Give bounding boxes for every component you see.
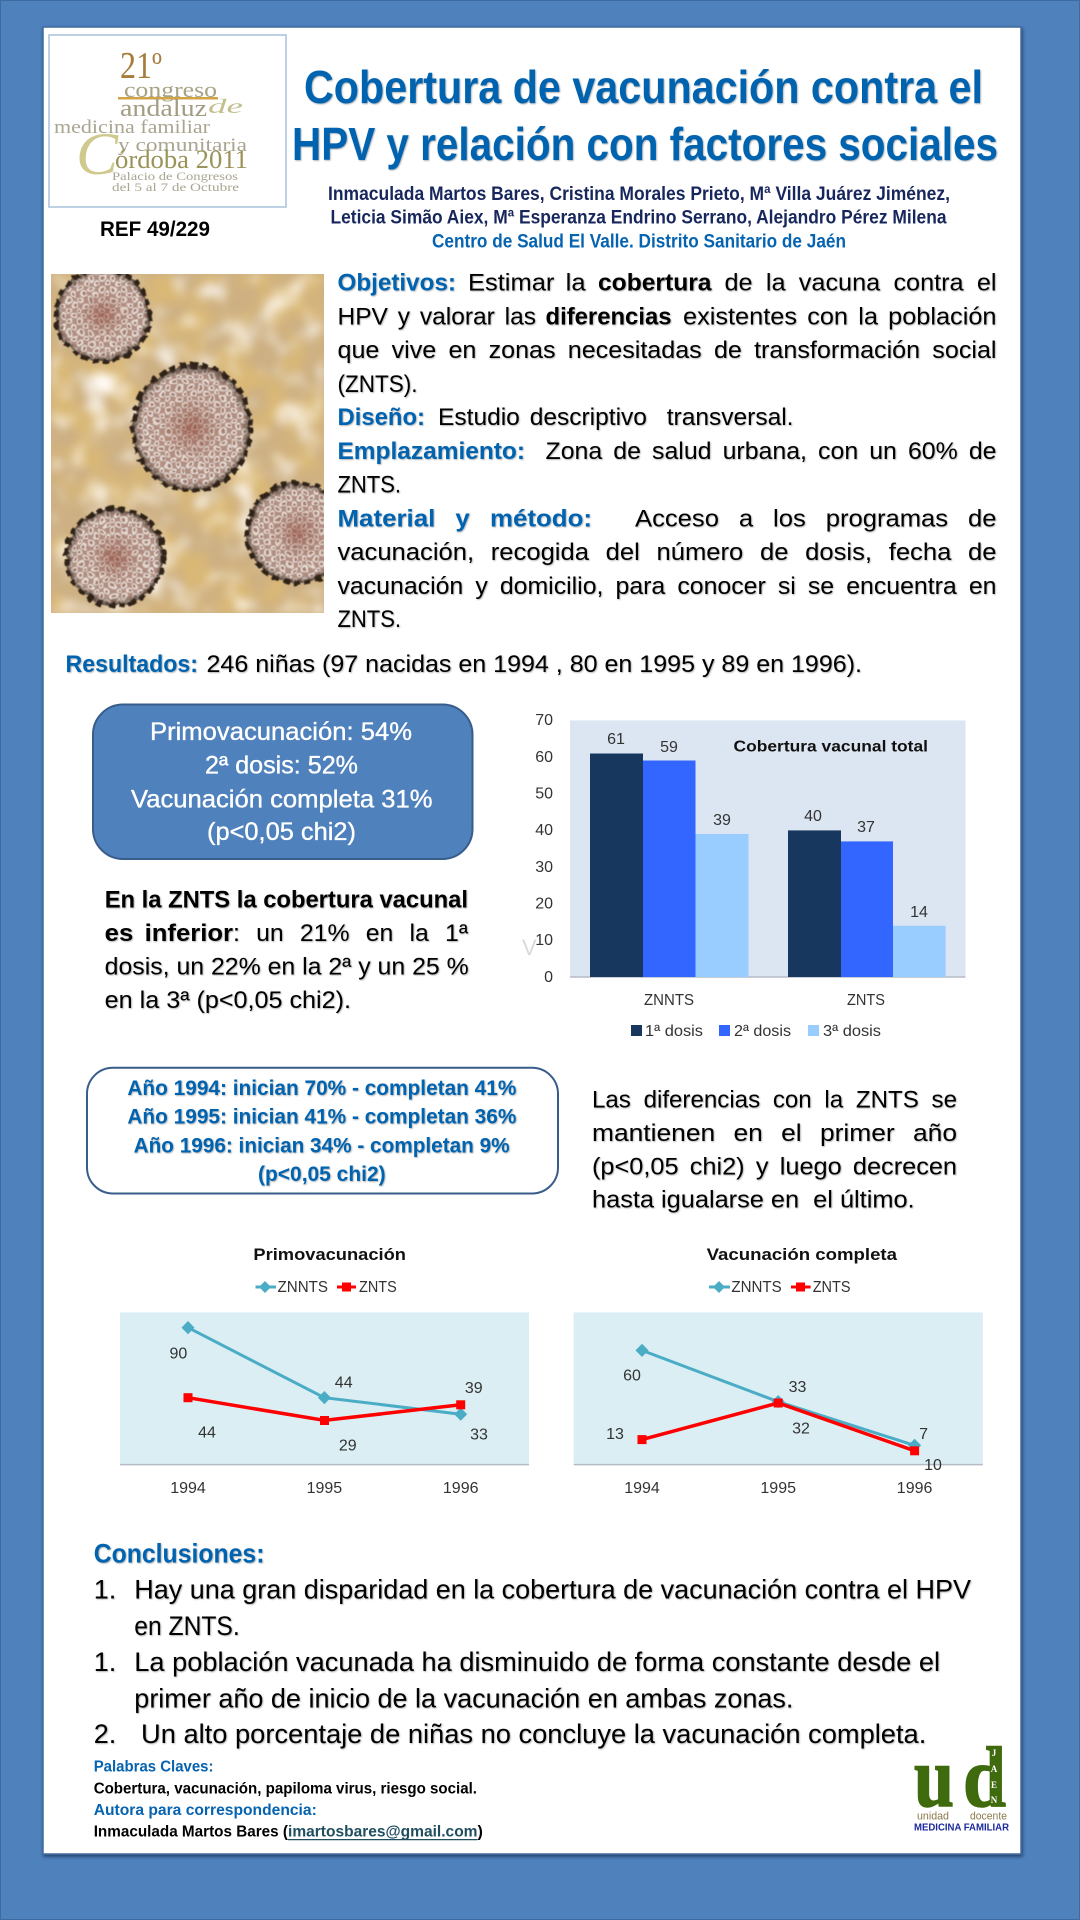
keywords and correspondence: Autora para correspondencia: [94,1802,317,1819]
bars: ZNTS [788,830,946,977]
congress logo: órdoba 2011 [115,145,248,174]
chart title: Cobertura vacunal total [734,738,928,755]
text: lower coverage in ZNTS: dosis, un 22% en la 2ª y un 25 % [105,954,469,981]
data labels: 39 [465,1380,483,1397]
text: objectives, design, setting, methods: que vive en zonas necesitadas de transformación social [338,337,996,364]
authors: Leticia Simão Aiex, Mª Esperanza Endrino Serrano, Alejandro Pérez Milena [330,208,947,229]
text: objectives, design, setting, methods: cobertura [598,270,712,297]
legend: ZNTS [813,1279,850,1296]
authors: Inmaculada Martos Bares, Cristina Morales Prieto, Mª Villa Juárez Jiménez, [328,184,950,205]
bar value labels [607,731,928,921]
conclusions list: Hay una gran disparidad en la cobertura de vacunación contra el HPV [134,1575,971,1605]
data labels: 33 [789,1379,806,1396]
text: objectives, design, setting, methods: Emplazamiento: [338,438,525,465]
congress logo: del 5 al 7 de Octubre [112,180,239,194]
keywords and correspondence [94,1758,483,1840]
text: objectives, design, setting, methods: existentes con la población [683,304,996,330]
year labels: 1995 [760,1480,796,1497]
congress logo: y comunitaria [118,135,248,156]
series: ZNTS [184,1393,465,1425]
conclusions list: 2. [94,1719,116,1749]
text: differences with ZNTS: Las diferencias con la ZNTS se [592,1086,957,1113]
callout: coverage by birth year: Año 1994: inician 70% - completan 41% [127,1077,517,1100]
title: HPV y relación con factores sociales [292,118,998,170]
legend: ZNNTS [278,1279,328,1296]
year labels: 1995 [307,1480,342,1497]
y axis labels: 10 [535,932,553,949]
text: lower coverage in ZNTS: en la 3ª (p<0,05 chi2). [105,987,351,1014]
congress logo: andaluz [120,96,207,122]
text: differences with ZNTS: (p<0,05 chi2) y luego decrecen [592,1154,957,1181]
bar value labels: 14 [910,904,928,921]
text: differences with ZNTS: mantienen en el primer año [592,1120,957,1147]
reference code: REF 49/229 [100,218,210,241]
data labels: 7 [919,1426,928,1443]
text: objectives, design, setting, methods: de la vacuna contra el [724,270,996,297]
congress logo: 21º [120,45,162,87]
callout: coverage by birth year: Año 1996: inician 34% - completan 9% [134,1135,510,1158]
y axis labels: 60 [535,749,553,766]
text: differences with ZNTS [592,1086,957,1213]
year labels [624,1480,932,1497]
year labels [170,1480,479,1497]
data labels: 44 [335,1374,353,1391]
text: objectives, design, setting, methods: Material y método: [338,506,592,532]
text: objectives, design, setting, methods: ZNTS. [338,606,401,633]
text: lower coverage in ZNTS: En la ZNTS la cobertura vacunal [105,886,468,913]
logo: unidad docente: unidad [917,1811,949,1823]
y axis labels: 30 [535,859,553,876]
bar value labels: 40 [804,808,822,825]
bar value labels: 39 [713,812,731,829]
bar value labels: 37 [857,819,875,836]
results sentence: 246 niñas (97 nacidas en 1994 , 80 en 1995 y 89 en 1996). [206,651,862,678]
legend: 1ª dosis [645,1023,703,1040]
data labels: 33 [470,1427,488,1444]
y axis labels: 40 [535,822,553,839]
text: objectives, design, setting, methods: (ZNTS). [338,371,418,398]
logo: unidad docente: A [991,1764,998,1774]
callout: overall coverage: 2ª dosis: 52% [205,752,358,780]
chart title: Primovacunación [253,1245,406,1264]
bar value labels: 59 [660,739,678,756]
bar chart: total vaccine coverage [535,712,966,1040]
keywords and correspondence: imartosbares@gmail.com [288,1824,478,1840]
text: objectives, design, setting, methods: vacunación y domicilio, para conocer si se encuentra en [338,573,996,600]
keywords and correspondence: Palabras Claves: [94,1758,214,1775]
year labels: 1996 [897,1480,932,1497]
text: lower coverage in ZNTS: : un 21% en la 1ª [233,920,468,947]
y axis labels: 70 [535,712,553,729]
keywords and correspondence: Inmaculada Martos Bares ( [94,1824,289,1840]
logo: unidad docente: N [991,1795,998,1805]
conclusions list: en ZNTS. [134,1611,240,1641]
text: objectives, design, setting, methods: vacunación, recogida del número de dosis, fecha de [338,539,996,566]
conclusions list [94,1575,971,1749]
category labels: ZNNTS [644,992,694,1009]
text: objectives, design, setting, methods: Zona de salud urbana, con un 60% de [546,438,996,465]
text: objectives, design, setting, methods: ZNTS. [338,472,401,499]
series: ZNTS [638,1398,919,1455]
bars: ZNNTS [590,754,748,977]
text: lower coverage in ZNTS: es inferior [105,920,233,947]
text: objectives, design, setting, methods [338,270,996,633]
data labels: 10 [924,1457,942,1474]
congress logo: C [76,121,119,187]
conclusions list: La población vacunada ha disminuido de forma constante desde el [134,1647,940,1677]
line chart: primovacunación [120,1245,529,1497]
legend: 3ª dosis [823,1023,881,1040]
legend: ZNTS [359,1279,397,1296]
logo: unidad docente: docente [970,1811,1007,1823]
image: HPV virus micrograph [51,269,349,613]
series: ZNNTS [182,1321,467,1421]
congress logo [49,35,286,207]
keywords and correspondence: ) [478,1824,483,1840]
congress logo: congreso [124,77,217,102]
callout: overall coverage: Vacunación completa 31% [131,785,432,813]
data labels: 44 [198,1424,216,1441]
conclusions heading: Conclusiones: [94,1538,264,1568]
results sentence: Resultados: [66,651,198,678]
y axis labels: 0 [544,969,553,986]
callout: coverage by birth year [87,1068,558,1194]
data labels: 60 [623,1368,641,1385]
text: lower coverage in ZNTS [105,886,469,1014]
data labels: 32 [792,1420,810,1437]
logo: unidad docente [914,1729,1010,1834]
data labels [170,1345,488,1454]
data labels [606,1368,942,1474]
y axis labels [535,712,553,986]
title [292,61,998,170]
logo: unidad docente: d [963,1729,1006,1825]
legend [256,1279,397,1296]
callout: coverage by birth year: Año 1995: inician 41% - completan 36% [127,1106,517,1129]
callout: overall coverage [93,704,472,859]
congress logo: medicina familiar [54,117,211,138]
callout: coverage by birth year: (p<0,05 chi2) [258,1163,386,1186]
y axis labels: 50 [535,786,553,802]
text: objectives, design, setting, methods: Objetivos: [338,270,456,297]
logo: unidad docente: MEDICINA FAMILIAR [914,1823,1010,1834]
text: objectives, design, setting, methods: Estudio descriptivo transversal. [438,404,794,431]
congress logo: de [208,96,243,118]
bar value labels: 61 [607,731,625,748]
keywords and correspondence: Cobertura, vacunación, papiloma virus, riesgo social. [94,1781,477,1798]
data labels: 90 [170,1345,187,1362]
authors: Centro de Salud El Valle. Distrito Sanitario de Jaén [432,231,846,252]
logo: unidad docente: E [991,1780,997,1790]
chart title: Vacunación completa [707,1245,898,1264]
conclusions list: 1. [94,1575,116,1605]
text: objectives, design, setting, methods: diferencias [546,304,672,330]
series: ZNNTS [636,1344,921,1452]
title: Cobertura de vacunación contra el [304,61,983,113]
year labels: 1994 [624,1480,660,1497]
legend: ZNNTS [731,1279,782,1296]
text: differences with ZNTS: hasta igualarse en el último. [592,1186,915,1213]
conclusions list: primer año de inicio de la vacunación en ambas zonas. [134,1684,793,1714]
text: objectives, design, setting, methods: Estimar la [468,270,586,297]
conclusions list: Un alto porcentaje de niñas no concluye la vacunación completa. [141,1719,926,1749]
year labels: 1994 [170,1480,206,1497]
data labels: 13 [606,1426,624,1443]
legend [631,1023,881,1040]
logo: unidad docente: J [992,1748,997,1758]
line chart: vacunación completa [574,1245,983,1497]
callout: overall coverage: (p<0,05 chi2) [207,818,356,846]
faint mark beside chart axis: V [522,935,537,960]
y axis labels: 20 [535,896,553,912]
congress logo: Palacio de Congresos [112,169,238,183]
logo: unidad docente: u [914,1729,954,1825]
year labels: 1996 [443,1480,479,1497]
legend [709,1279,850,1296]
legend: 2ª dosis [734,1023,791,1040]
authors [328,184,950,252]
data labels: 29 [339,1437,357,1454]
text: objectives, design, setting, methods: Diseño: [338,404,425,431]
category labels: ZNTS [847,992,885,1009]
conclusions list: 1. [94,1647,116,1677]
category labels [644,992,885,1009]
text: objectives, design, setting, methods: Acceso a los programas de [635,506,996,532]
text: objectives, design, setting, methods: HPV y valorar las [338,304,536,330]
callout: overall coverage: Primovacunación: 54% [150,718,412,746]
